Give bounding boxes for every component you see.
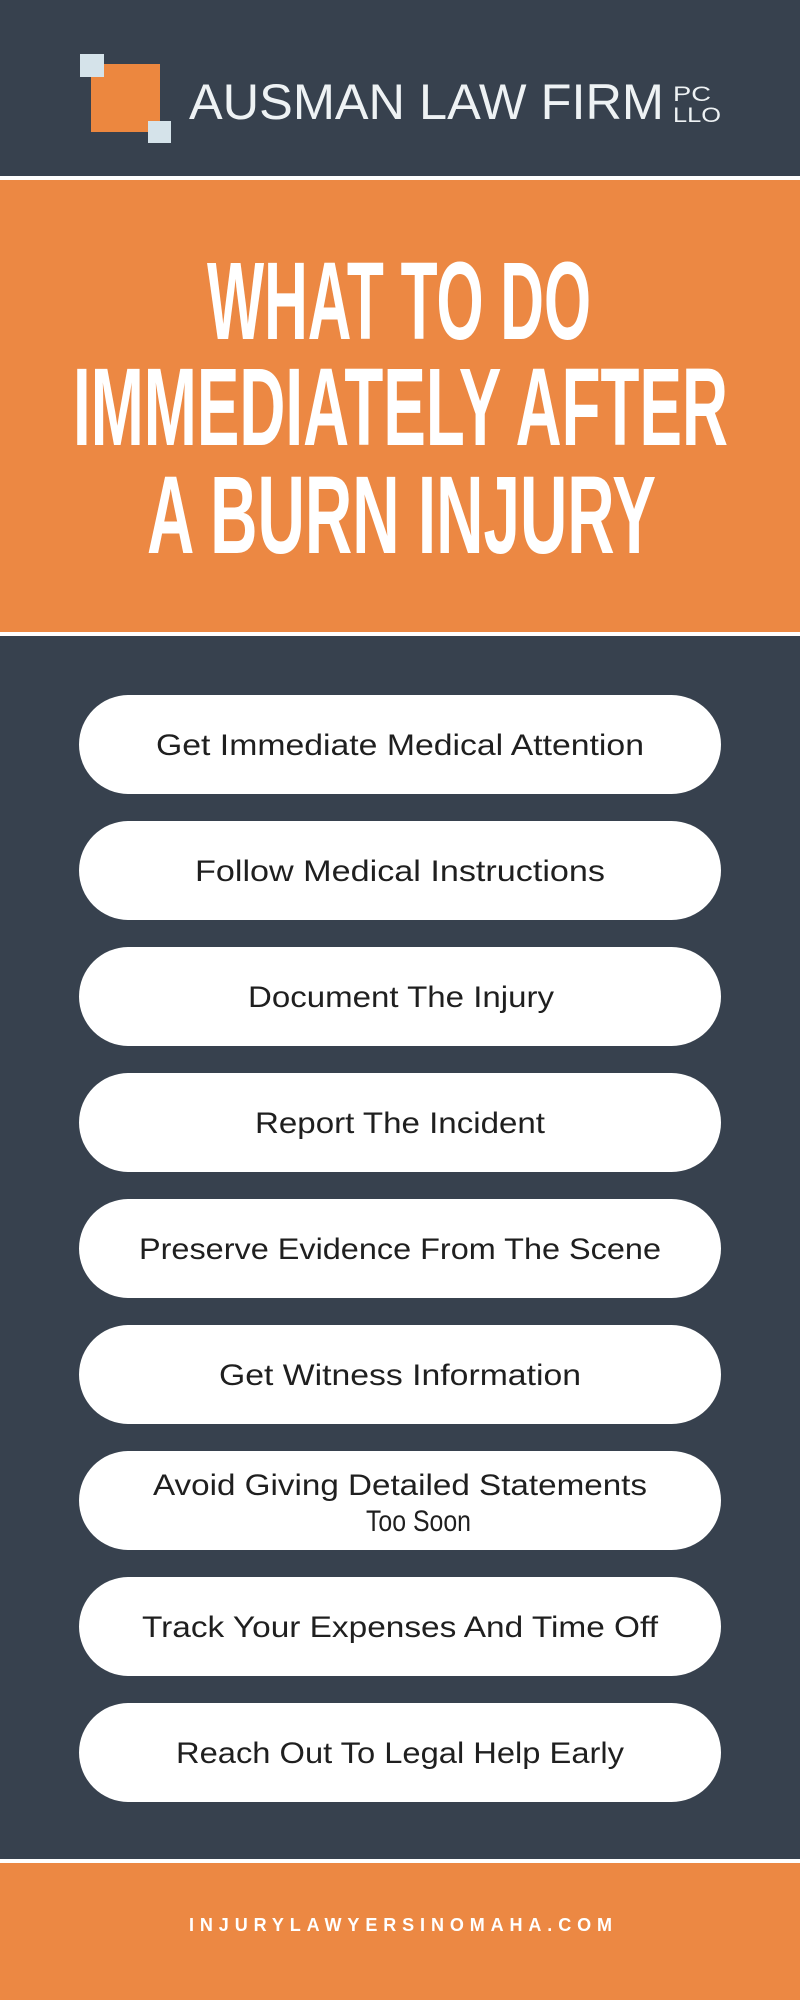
step 1: Get Immediate Medical Attention: [156, 729, 644, 762]
footer url: INJURYLAWYERSINOMAHA.COM: [189, 1915, 612, 1935]
step 6: [79, 1325, 721, 1424]
step 4: Report The Incident: [255, 1107, 546, 1140]
step 9: [79, 1703, 721, 1802]
step 4: [79, 1073, 721, 1172]
step 6: Get Witness Information: [219, 1359, 581, 1392]
step 8: Track Your Expenses And Time Off: [142, 1611, 659, 1644]
step 2: Follow Medical Instructions: [195, 855, 605, 888]
step 3: Document The Injury: [248, 981, 554, 1014]
title panel: [0, 180, 800, 632]
title: [73, 240, 728, 577]
step 8: [79, 1577, 721, 1676]
steps list: [79, 695, 721, 1802]
logo text: AUSMAN LAW FIRM: [189, 74, 664, 130]
step 3: [79, 947, 721, 1046]
step 1: [79, 695, 721, 794]
logo text: LLO: [673, 104, 721, 127]
step 7: Too Soon: [366, 1505, 471, 1538]
step 5: [79, 1199, 721, 1298]
logo icon: [80, 54, 171, 143]
step 9: Reach Out To Legal Help Early: [176, 1737, 624, 1770]
header band: [0, 0, 800, 176]
step 2: [79, 821, 721, 920]
step 7: Avoid Giving Detailed Statements: [153, 1469, 647, 1502]
step 5: Preserve Evidence From The Scene: [139, 1233, 661, 1266]
step 7: [79, 1451, 721, 1550]
footer: [0, 1863, 800, 2000]
logo text: PC: [673, 83, 711, 106]
